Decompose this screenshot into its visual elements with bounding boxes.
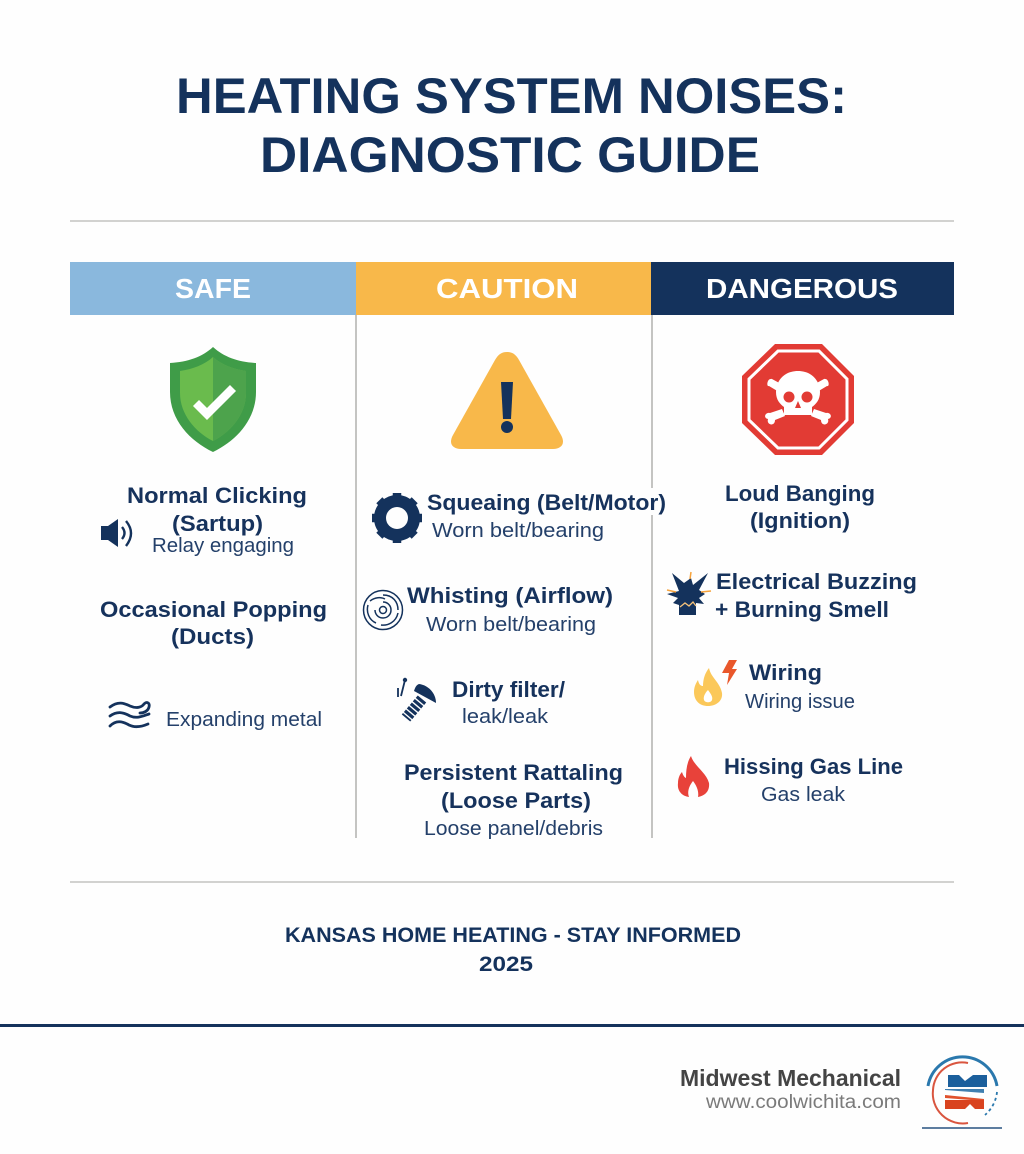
header: safe [70, 262, 356, 315]
brand name and website [680, 1065, 901, 1113]
brand name and website: Midwest Mechanical [680, 1065, 901, 1091]
item: squeaking [427, 490, 666, 542]
header: caution: CAUTION [436, 273, 578, 304]
icon: flame and bolt [694, 660, 737, 706]
header: dangerous [651, 262, 954, 315]
title [176, 68, 847, 183]
footer tagline: 2025 [479, 953, 533, 976]
icon: waves [110, 703, 149, 727]
footer tagline [285, 924, 741, 976]
item: persistent rattling: Loose panel/debris [424, 818, 603, 840]
icon: company logo [922, 1057, 1002, 1129]
panel: safe [100, 347, 327, 731]
title: HEATING SYSTEM NOISES: [176, 68, 847, 124]
item: normal clicking: Relay engaging [152, 535, 294, 557]
item: occasional popping [100, 597, 327, 649]
item: wiring: Wiring [749, 660, 822, 685]
item: dirty filter: leak/leak [462, 706, 549, 728]
item: hissing gas line: Gas leak [761, 784, 846, 806]
item: electrical buzzing: Electrical Buzzing [716, 569, 917, 594]
item: normal clicking: Normal Clicking [127, 483, 307, 508]
brand name and website: www.coolwichita.com [705, 1092, 901, 1113]
item: dirty filter: Dirty filter/ [452, 677, 565, 702]
item: squeaking: Worn belt/bearing [432, 520, 604, 542]
footer tagline: KANSAS HOME HEATING - STAY INFORMED [285, 924, 741, 947]
icon: speaker [101, 519, 131, 547]
panel: dangerous [667, 344, 917, 806]
icon: stop sign with skull [742, 344, 854, 455]
item: persistent rattling [404, 760, 623, 840]
item: wiring: Wiring issue [745, 691, 855, 713]
icon: gear [372, 493, 422, 543]
title: DIAGNOSTIC GUIDE [260, 127, 760, 183]
icon: screw [398, 678, 436, 718]
icon: red flame [678, 756, 709, 797]
panel: caution [364, 352, 666, 840]
item: loud banging: Loud Banging [725, 481, 875, 506]
item: normal clicking: (Sartup) [172, 511, 263, 536]
item: hissing gas line [724, 754, 903, 806]
icon: warning triangle [451, 352, 563, 449]
item: whistling: Worn belt/bearing [426, 614, 596, 636]
item: loud banging: (Ignition) [750, 508, 850, 533]
item: electrical buzzing [715, 569, 917, 622]
header: safe: SAFE [175, 273, 251, 304]
item: dirty filter [452, 677, 565, 728]
header: caution [356, 262, 651, 315]
item: whistling [407, 583, 613, 636]
text: expanding metal: Expanding metal [166, 709, 322, 731]
icon: swirl [364, 590, 402, 630]
item: squeaking: Squeaing (Belt/Motor) [427, 490, 666, 515]
item: persistent rattling: Persistent Rattaling [404, 760, 623, 785]
item: hissing gas line: Hissing Gas Line [724, 754, 903, 779]
item: normal clicking [127, 483, 307, 557]
item: persistent rattling: (Loose Parts) [441, 788, 591, 813]
item: occasional popping: (Ducts) [171, 624, 254, 649]
item: electrical buzzing: + Burning Smell [715, 597, 889, 622]
item: wiring [745, 660, 855, 713]
item: occasional popping: Occasional Popping [100, 597, 327, 622]
icon: green shield with check [170, 347, 256, 452]
item: whistling: Whisting (Airflow) [407, 583, 613, 608]
icon: explosion [667, 572, 711, 615]
item: loud banging [725, 481, 875, 533]
header: dangerous: DANGEROUS [706, 273, 898, 304]
